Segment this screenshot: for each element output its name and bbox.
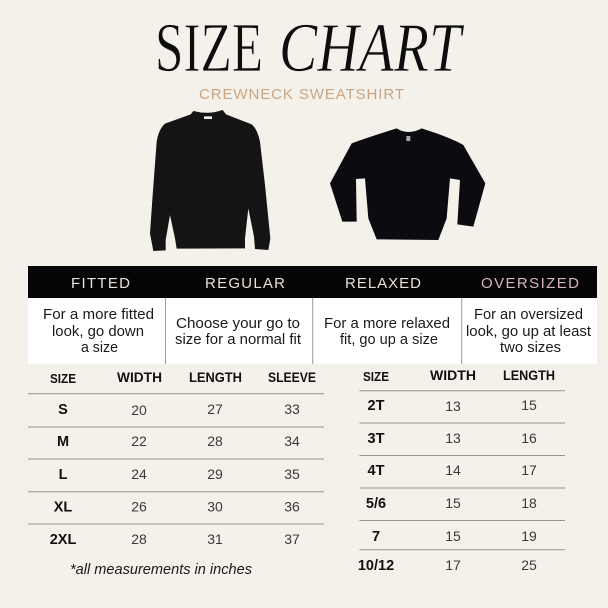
row M: 22	[131, 433, 147, 449]
row M: 28	[207, 433, 223, 449]
regular description: Choose your go to	[176, 315, 300, 332]
row 2XL: 2XL	[50, 532, 76, 548]
youth table header: WIDTH	[430, 368, 476, 383]
fit guide panel	[28, 266, 597, 364]
row M: M	[57, 434, 69, 450]
row L	[59, 466, 300, 483]
row S	[58, 401, 300, 418]
row XL: 26	[131, 498, 147, 514]
oversized description: For an oversized	[474, 306, 583, 323]
row S: 33	[284, 401, 300, 417]
white description band	[28, 298, 597, 364]
oversized description	[466, 306, 592, 356]
header bar: REGULAR	[205, 275, 285, 292]
row XL: 30	[207, 498, 223, 514]
row 7: 19	[521, 528, 537, 544]
row S: 27	[207, 401, 223, 417]
header bar: OVERSIZED	[481, 275, 579, 292]
youth table header: LENGTH	[503, 368, 555, 383]
row 3T	[368, 430, 537, 447]
relaxed description: For a more relaxed	[324, 315, 450, 332]
title: SIZE	[155, 10, 263, 87]
row S: 20	[131, 402, 147, 418]
row XL: XL	[54, 500, 72, 516]
youth table header: SIZE	[363, 370, 389, 384]
adult table header: SLEEVE	[268, 370, 316, 385]
row 5/6	[366, 495, 537, 512]
header bar: FITTED	[71, 275, 130, 292]
row M: 34	[284, 433, 300, 449]
row 4T: 4T	[368, 463, 385, 479]
row 10/12: 25	[521, 557, 537, 573]
row XL	[54, 498, 300, 516]
adult table header: WIDTH	[117, 370, 162, 385]
row L: 29	[207, 466, 223, 482]
regular description: size for a normal fit	[175, 331, 302, 348]
row 7	[372, 528, 537, 545]
row 2XL: 31	[207, 531, 223, 547]
relaxed description: fit, go up a size	[340, 331, 438, 348]
oversized description: look, go up at least	[466, 323, 592, 340]
row 5/6: 15	[445, 495, 461, 511]
fitted description: a size	[81, 339, 118, 356]
adult table header	[50, 370, 316, 386]
youth size table	[358, 368, 565, 574]
footnote: *all measurements in inches	[70, 562, 252, 578]
row 2XL: 37	[284, 531, 300, 547]
row 4T: 17	[521, 462, 537, 478]
adult table header: LENGTH	[189, 370, 242, 385]
row 2T: 15	[521, 397, 537, 413]
row 10/12: 10/12	[358, 558, 394, 574]
row XL: 36	[284, 498, 300, 514]
row S: S	[58, 402, 68, 418]
relaxed description	[324, 315, 450, 348]
title: CHART	[279, 10, 465, 87]
adult table header: SIZE	[50, 372, 76, 386]
row L: L	[59, 467, 68, 483]
row M	[57, 433, 300, 450]
youth table header	[363, 368, 555, 384]
row L: 35	[284, 466, 300, 482]
row 3T: 3T	[368, 431, 385, 447]
row L: 24	[131, 466, 147, 482]
title	[155, 10, 465, 87]
oversized description: two sizes	[500, 339, 561, 356]
fitted description	[43, 306, 154, 356]
row 2T: 2T	[368, 398, 385, 414]
row 4T	[368, 462, 537, 479]
row 10/12: 17	[445, 557, 461, 573]
row 4T: 14	[445, 462, 461, 478]
fitted description: look, go down	[52, 323, 144, 340]
row 5/6: 18	[521, 495, 537, 511]
row 2T: 13	[445, 398, 461, 414]
subtitle: CREWNECK SWEATSHIRT	[199, 86, 404, 103]
regular description	[175, 315, 302, 348]
row 10/12	[358, 557, 537, 574]
adult size table	[28, 370, 324, 548]
row 3T: 16	[521, 430, 537, 446]
header bar	[28, 266, 597, 298]
fitted description: For a more fitted	[43, 306, 154, 323]
row 7: 15	[445, 528, 461, 544]
row 2T	[368, 397, 537, 414]
row 2XL	[50, 531, 300, 548]
row 5/6: 5/6	[366, 496, 386, 512]
icon: fitted sweatshirt photo	[150, 110, 270, 251]
header bar: RELAXED	[345, 275, 421, 292]
row 2XL: 28	[131, 531, 147, 547]
icon: relaxed sweatshirt photo	[330, 128, 485, 240]
row 7: 7	[372, 529, 380, 545]
row 3T: 13	[445, 430, 461, 446]
